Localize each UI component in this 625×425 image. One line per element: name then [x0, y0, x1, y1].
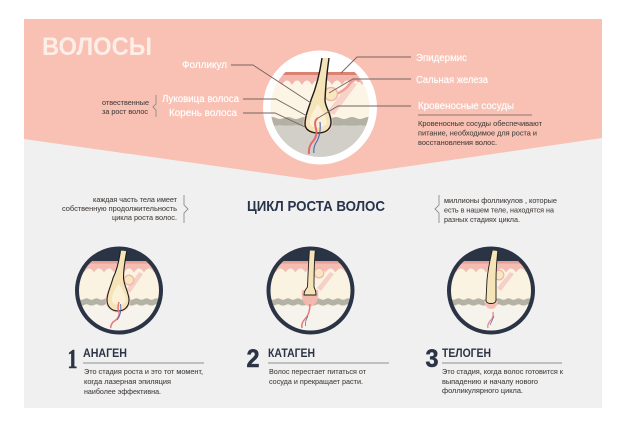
- blood vessels description: питание, необходимое для роста и: [418, 128, 537, 138]
- blood vessels: [309, 118, 318, 154]
- blood vessels description: [418, 119, 543, 147]
- label: follicle: Фолликул: [182, 60, 227, 71]
- stage 1: anagen: наиболее эффективна.: [84, 387, 161, 396]
- main hair follicle diagram: [263, 50, 377, 164]
- anagen illustration: [74, 246, 164, 338]
- stage 1: anagen: 1: [68, 344, 78, 374]
- left note: собственную продолжительность: [62, 204, 177, 213]
- catagen illustration: [266, 246, 356, 338]
- left note: каждая часть тела имеет: [93, 195, 178, 204]
- label: sebaceous gland: [329, 75, 488, 93]
- stage 3: telogen: Это стадия, когда волос готовится к: [442, 367, 564, 376]
- blood vessels description: Кровеносные сосуды обеспечивают: [418, 119, 543, 128]
- label: sebaceous gland: Сальная железа: [416, 75, 488, 86]
- note: responsible for growth: [102, 95, 156, 117]
- label: hair root: Корень волоса: [169, 108, 237, 119]
- pink header panel: [24, 19, 602, 180]
- right note: разных стадиях цикла.: [444, 215, 520, 224]
- stage 3: telogen: ТЕЛОГЕН: [442, 346, 491, 360]
- blood vessels description: восстановления волос.: [418, 138, 497, 147]
- stage 3: telogen: 3: [426, 345, 438, 373]
- stage 1: anagen: АНАГЕН: [83, 346, 127, 360]
- stage 1: anagen: когда лазерная эпиляция: [84, 377, 171, 386]
- stage 2: catagen: сосуда и прекращает расти.: [269, 377, 363, 386]
- title: ВОЛОСЫ: [42, 33, 152, 61]
- note: responsible for growth: за рост волос: [102, 107, 148, 116]
- stage 2: catagen: КАТАГЕН: [268, 346, 315, 360]
- stage 3: telogen: [426, 345, 564, 395]
- stage 1: anagen: Это стадия роста и это тот момент,: [84, 367, 203, 376]
- label: blood vessels: [318, 101, 532, 118]
- label: epidermis: Эпидермис: [416, 53, 467, 64]
- stage 2: catagen: Волос перестает питаться от: [269, 367, 367, 376]
- left note: цикла роста волос.: [112, 213, 177, 222]
- telogen illustration: [446, 246, 536, 338]
- section heading: ЦИКЛ РОСТА ВОЛОС: [247, 198, 385, 215]
- stage 3: telogen: выпадению и началу нового: [442, 377, 538, 386]
- left note: [62, 195, 188, 223]
- note: responsible for growth: отвественные: [102, 98, 149, 107]
- label: hair root: [169, 108, 305, 127]
- label: blood vessels: Кровеносные сосуды: [418, 101, 514, 112]
- stage 2: catagen: [246, 345, 389, 386]
- stage 3: telogen: фолликулярного цикла.: [442, 386, 523, 395]
- label: hair bulb: [162, 94, 307, 116]
- hair bulb: [304, 58, 332, 134]
- right note: миллионы фолликулов , которые: [444, 196, 557, 205]
- label: epidermis: [341, 53, 467, 73]
- stage 2: catagen: 2: [246, 345, 260, 373]
- label: follicle: [182, 60, 311, 103]
- stage 1: anagen: [68, 344, 204, 396]
- right note: есть в нашем теле, находятся на: [444, 206, 555, 214]
- right note: [435, 195, 557, 224]
- label: hair bulb: Луковица волоса: [162, 94, 239, 105]
